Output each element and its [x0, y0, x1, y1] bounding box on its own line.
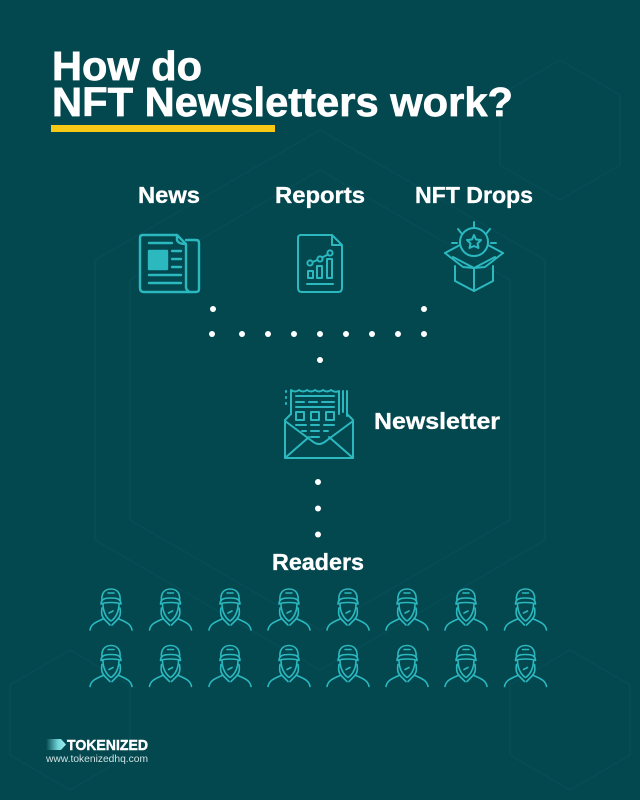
icon: report document	[298, 235, 342, 292]
connector: lower dots	[315, 479, 321, 538]
title: NFT Newsletters work?	[52, 79, 513, 125]
heading: NFT Drops: NFT Drops	[415, 182, 533, 208]
heading: Newsletter: Newsletter	[374, 408, 500, 434]
heading: Readers: Readers	[272, 549, 364, 575]
icon: open box with star	[445, 222, 503, 291]
connector: dots	[209, 306, 427, 363]
icon: newspaper	[140, 235, 199, 292]
heading: News: News	[138, 182, 200, 208]
title: How do	[52, 43, 202, 89]
title	[52, 43, 513, 125]
website url: www.tokenizedhq.com	[45, 753, 148, 765]
title underline	[51, 125, 275, 132]
logo mark	[46, 739, 66, 750]
readers icon grid	[90, 589, 546, 686]
icon: newsletter envelope	[285, 390, 353, 458]
logo wordmark: TOKENIZED	[67, 738, 148, 754]
heading: Reports: Reports	[275, 182, 365, 208]
